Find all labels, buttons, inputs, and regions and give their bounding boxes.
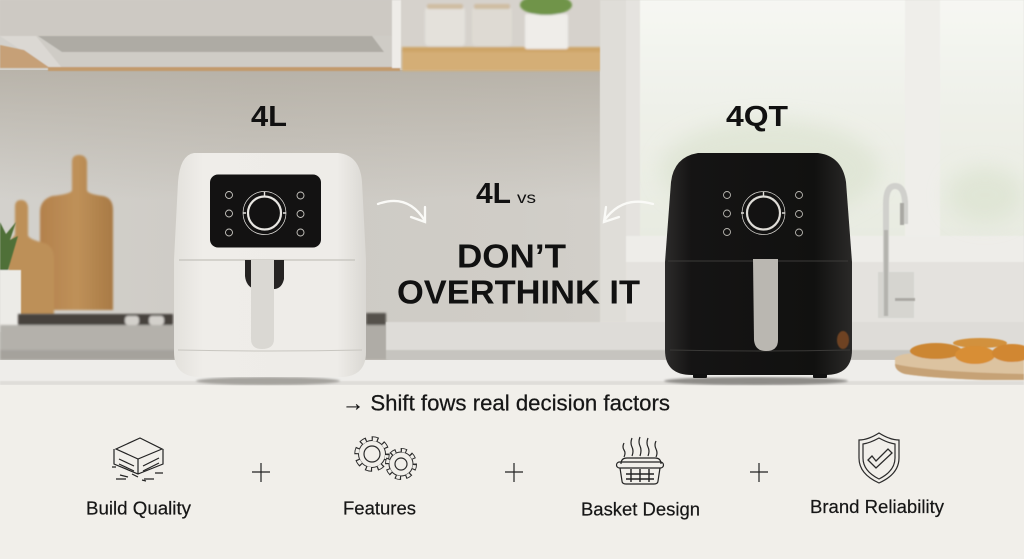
blurred trees outside — [660, 120, 1023, 223]
back counter — [386, 322, 1024, 360]
handle recess — [245, 260, 284, 289]
base line — [670, 350, 850, 351]
comparison heading: vs — [517, 190, 536, 207]
comparison heading: 4L — [476, 178, 511, 210]
main headline: OVERTHINK IT — [397, 274, 641, 312]
label: Basket Design — [581, 500, 700, 520]
label: 4L: 4L — [251, 101, 287, 133]
label: Features — [343, 498, 416, 518]
warm reflection — [837, 331, 849, 349]
stovetop — [0, 313, 388, 360]
arrow: right curve — [604, 202, 653, 222]
highlight — [690, 165, 713, 167]
main headline — [397, 238, 641, 312]
plate of nuggets — [895, 338, 1024, 380]
counter shadow — [196, 377, 340, 385]
touch buttons — [724, 192, 802, 236]
large gear — [357, 439, 387, 469]
faucet — [878, 186, 915, 318]
base line — [178, 350, 362, 351]
small gear — [387, 450, 415, 478]
wooden shelf with jars and plant — [402, 0, 603, 71]
plant and white pot — [0, 222, 21, 332]
dial — [243, 192, 286, 234]
factor: brand reliability — [810, 433, 944, 517]
info panel background — [0, 385, 1024, 559]
plus sign 2 — [505, 463, 523, 482]
arrow: left curve — [378, 201, 425, 222]
feet — [693, 374, 827, 378]
counter shadow — [664, 377, 848, 385]
icon: shield check — [859, 433, 899, 483]
subheading: → Shift fows real decision factors — [342, 390, 670, 416]
kitchen background — [0, 0, 1024, 386]
touch buttons — [226, 192, 304, 236]
main headline: DON’T — [457, 238, 567, 276]
air fryer: white 4L — [174, 153, 366, 385]
shaded upper wall — [0, 70, 600, 200]
icon: steaming basket — [616, 437, 664, 484]
handle — [251, 260, 274, 349]
body — [665, 153, 852, 375]
dial — [741, 192, 785, 234]
countertop — [0, 360, 1024, 386]
handle — [753, 259, 778, 351]
drawer divider — [179, 259, 355, 261]
label: Brand Reliability — [810, 497, 944, 517]
icon: box — [112, 438, 163, 481]
comparison heading — [476, 178, 536, 210]
range hood — [0, 0, 401, 71]
factor: build quality — [86, 438, 191, 518]
label: Build Quality — [86, 498, 191, 518]
factor: basket design — [581, 437, 700, 520]
factor: features — [343, 439, 416, 518]
plus sign 1 — [252, 463, 270, 482]
drawer divider — [668, 260, 848, 262]
upper wall above shelf — [400, 0, 600, 50]
window and frame — [600, 0, 1024, 355]
label: 4QT: 4QT — [726, 101, 788, 133]
control panel — [210, 174, 321, 248]
counter front edge — [0, 381, 1024, 385]
body — [174, 153, 366, 377]
plus sign 3 — [750, 463, 768, 482]
air fryer: black 4QT — [664, 153, 852, 385]
icon: gears — [357, 439, 415, 478]
cutting boards — [8, 155, 113, 315]
